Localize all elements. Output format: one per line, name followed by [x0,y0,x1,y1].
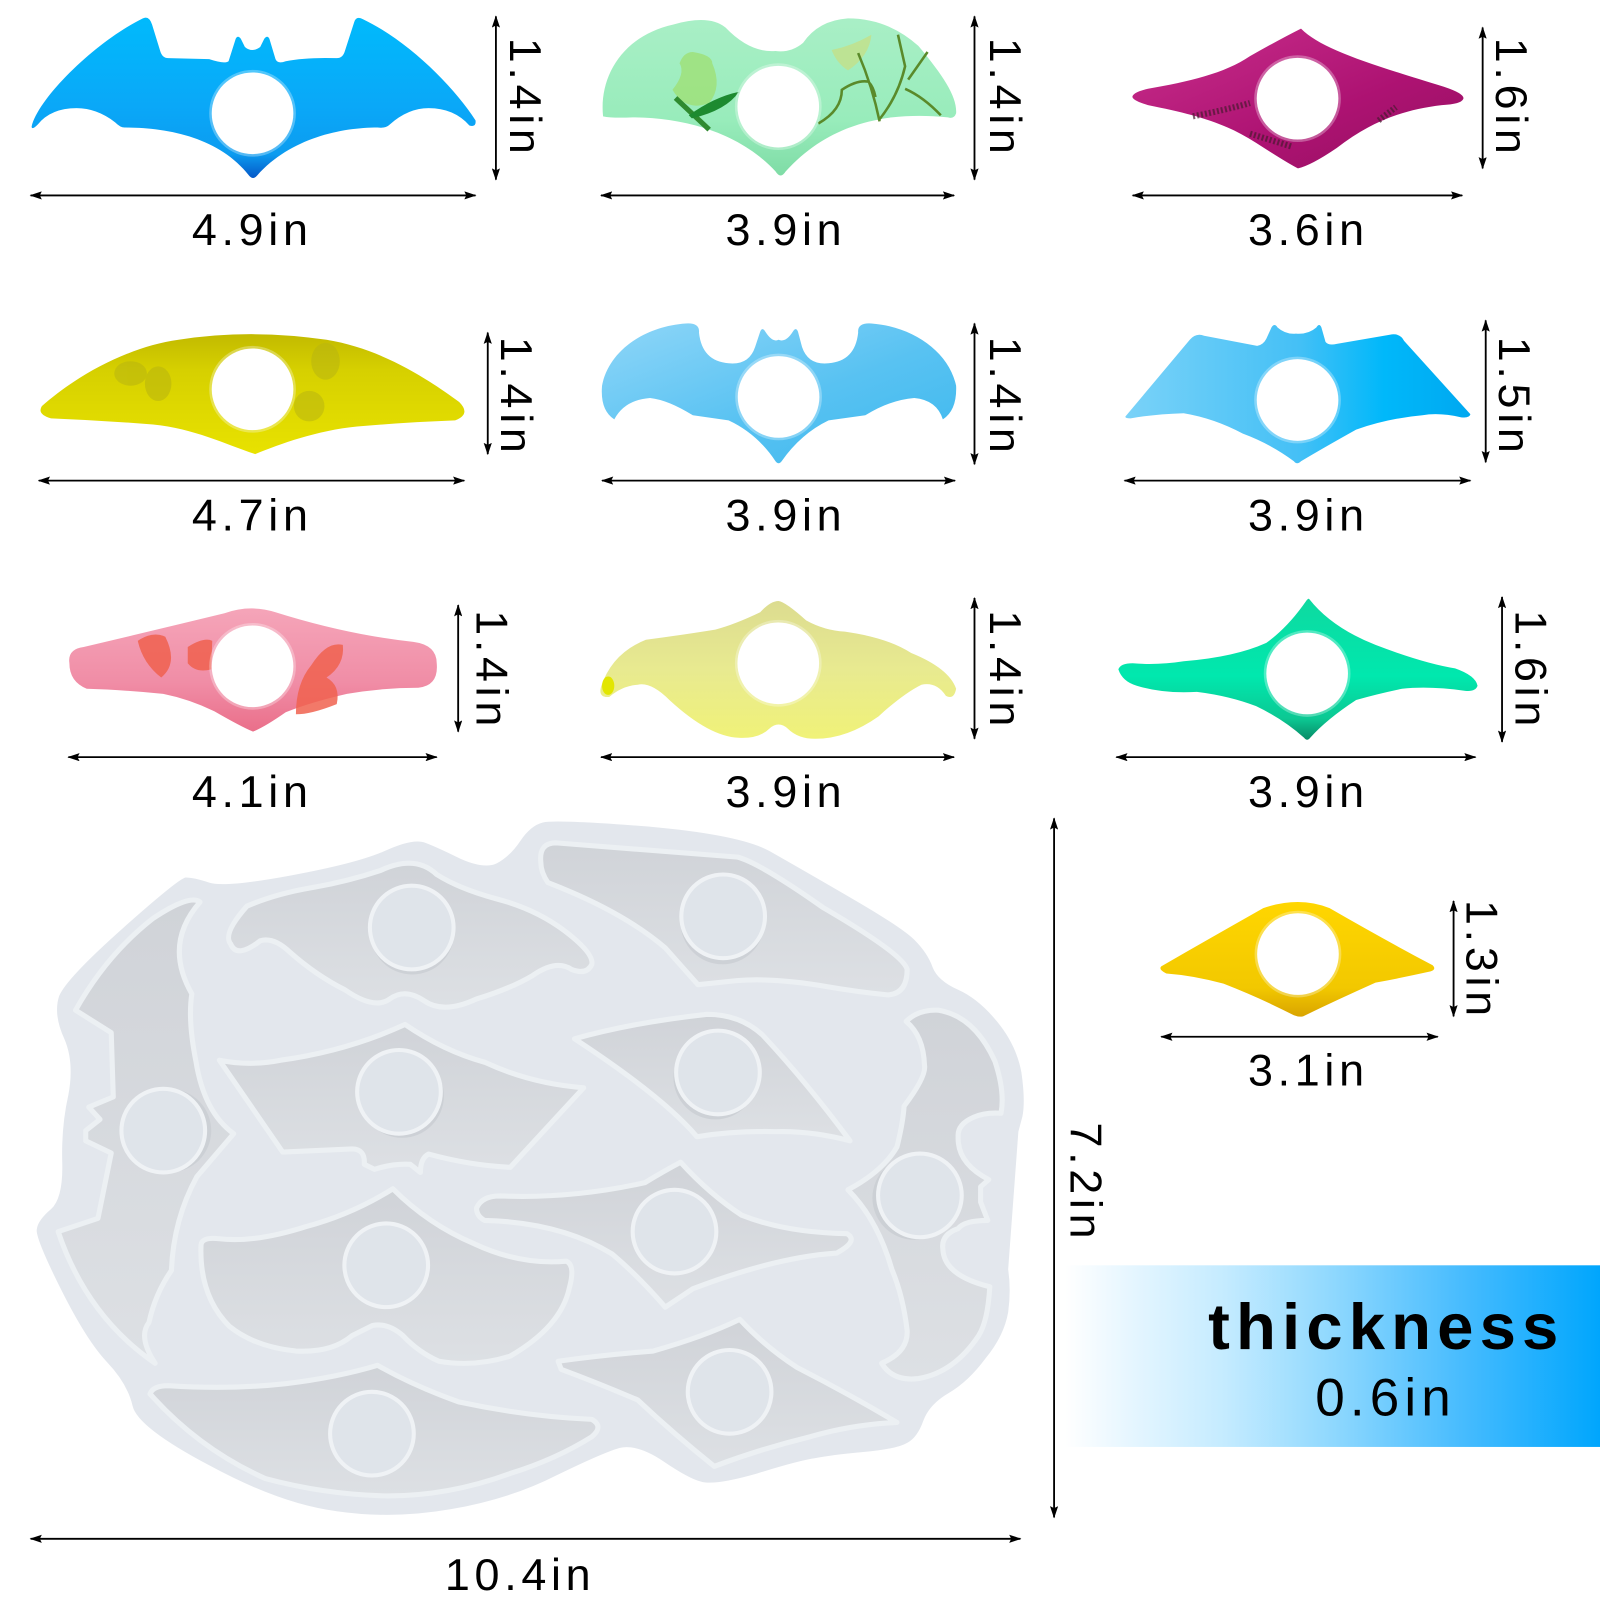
height dimension: 1.4in [980,337,1031,458]
width dimension: 3.9in [1248,766,1369,817]
shape: gold eye [1160,902,1434,1017]
shape: pale lime wing [600,601,956,739]
mold height dimension: 7.2in [1060,1122,1111,1243]
bookmark: teal star, 3.9in by 1.6in [1116,597,1556,817]
mold body [37,822,1024,1515]
width dimension: 3.6in [1248,204,1369,255]
yellow tip accent [602,677,614,695]
width dimension: 3.9in [1248,490,1369,541]
finger hole [738,356,819,438]
cavity: bottom right [558,1319,897,1466]
shape: teal star [1118,599,1478,740]
finger hole [212,72,293,154]
finger hole [737,66,819,147]
cavity: centre bat [219,1024,584,1172]
width dimension: 3.9in [726,766,846,817]
shape: angular bat [1125,325,1470,463]
bookmark: yellow crescent, 4.7in by 1.4in [39,333,542,541]
bookmark: blue bat, 4.9in by 1.4in [31,16,551,255]
cavity: right bat [848,1010,1002,1379]
silicone mold [37,822,1024,1515]
cavity: lower left wing [201,1189,572,1363]
finger hole [1257,359,1338,441]
shape: magenta diamond [1132,29,1463,168]
banner background [1065,1265,1600,1447]
cavity: right eye [574,1014,850,1141]
bookmark: magenta diamond, 3.6in by 1.6in [1132,28,1537,255]
shape: green wing [603,18,956,176]
width dimension: 3.9in [726,490,846,541]
bookmark: pink with petals, 4.1in by 1.4in [68,605,518,817]
height dimension: 1.3in [1456,900,1507,1021]
finger hole [212,626,293,707]
shape: yellow crescent [40,334,464,454]
height dimension: 1.4in [980,38,1031,159]
pressed fern marks [1193,103,1396,147]
width dimension: 4.9in [192,204,313,255]
height dimension: 1.4in [491,337,542,458]
cavity: bottom crescent [150,1365,598,1496]
cavity: top middle [229,863,592,1007]
height dimension: 1.4in [500,38,551,159]
height dimension: 1.6in [1505,610,1556,731]
width dimension: 4.7in [192,490,313,541]
bookmark: gold eye, 3.1in by 1.3in [1160,900,1507,1096]
width dimension: 4.1in [192,766,313,817]
height dimension: 1.4in [980,610,1031,731]
height dimension: 1.5in [1489,337,1540,458]
mold width dimension: 10.4in [445,1549,595,1600]
finger hole [212,348,293,430]
finger hole [1257,913,1339,995]
banner heading: thickness [1208,1290,1565,1363]
shape: pink band [69,608,437,732]
banner value: 0.6in [1315,1368,1456,1427]
shape: sky-blue bat [602,323,956,463]
height dimension: 1.6in [1486,38,1537,159]
width dimension: 3.9in [726,204,846,255]
pressed petals [138,634,343,714]
shape: blue bat [32,18,476,178]
pressed leaves [114,343,340,421]
bookmark: marbled sky-blue bat, 3.9in by 1.4in [602,323,1031,541]
pressed leaves [672,35,941,130]
width dimension: 3.1in [1248,1045,1369,1096]
cavity: top right [541,843,907,995]
bookmark: pale lime wing, 3.9in by 1.4in [600,598,1031,817]
cavity: centre diamond [477,1162,851,1307]
finger hole [737,622,819,704]
bookmark: green with leaves, 3.9in by 1.4in [601,16,1031,255]
finger hole [1257,58,1338,139]
cavity: left bat [58,900,234,1363]
bookmark: two-tone blue angular bat, 3.9in by 1.5in [1124,320,1540,541]
thickness banner [1065,1265,1600,1447]
finger hole [1266,633,1348,714]
height dimension: 1.4in [467,610,518,731]
